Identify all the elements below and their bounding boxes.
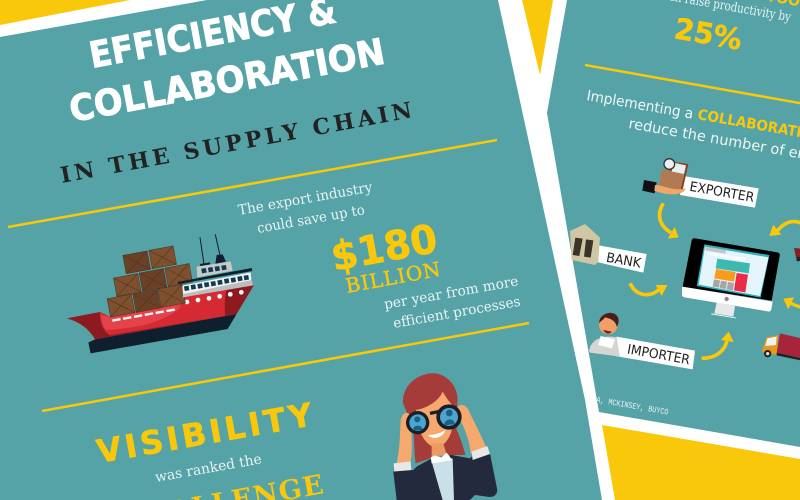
- sources: A, MCKINSEY, BUYCO: [595, 395, 669, 418]
- text: export savings: The export industry: [237, 180, 374, 219]
- icon: cargo ship: [67, 234, 254, 353]
- bank label and icon: [570, 224, 647, 273]
- panel: right page: [547, 0, 800, 447]
- panel: left page: [0, 0, 602, 500]
- icon: ship fragment: [794, 248, 800, 261]
- subtitle: IN THE SUPPLY CHAIN: [58, 97, 414, 189]
- text: collaborative intro: Implementing a: [585, 88, 694, 123]
- illustration: woman with binoculars: [393, 373, 497, 500]
- monitor: [682, 238, 780, 318]
- truck: [762, 333, 800, 361]
- text: collaborative intro: [585, 88, 800, 168]
- heading: visibility: VISIBILITY: [94, 395, 316, 471]
- importer label and icon: IMPORTER: [626, 342, 691, 368]
- exporter label and icon: [642, 159, 759, 208]
- arrows: flow to platform: [630, 203, 800, 358]
- bank label and icon: BANK: [605, 251, 643, 272]
- stat: $180 billion: BILLION: [344, 257, 442, 298]
- stat: $180 billion: $180: [327, 216, 441, 281]
- exporter label and icon: EXPORTER: [688, 180, 755, 206]
- stat: 25%: 25%: [672, 11, 745, 57]
- text: export savings: efficient processes: [392, 294, 522, 332]
- text: export savings: [237, 180, 522, 332]
- text: ranked: was ranked the: [154, 451, 263, 486]
- text: export savings: per year from more: [383, 274, 520, 313]
- text: export savings: could save up to: [256, 202, 366, 237]
- importer label and icon: [589, 313, 695, 369]
- title: COLLABORATION: [66, 32, 388, 131]
